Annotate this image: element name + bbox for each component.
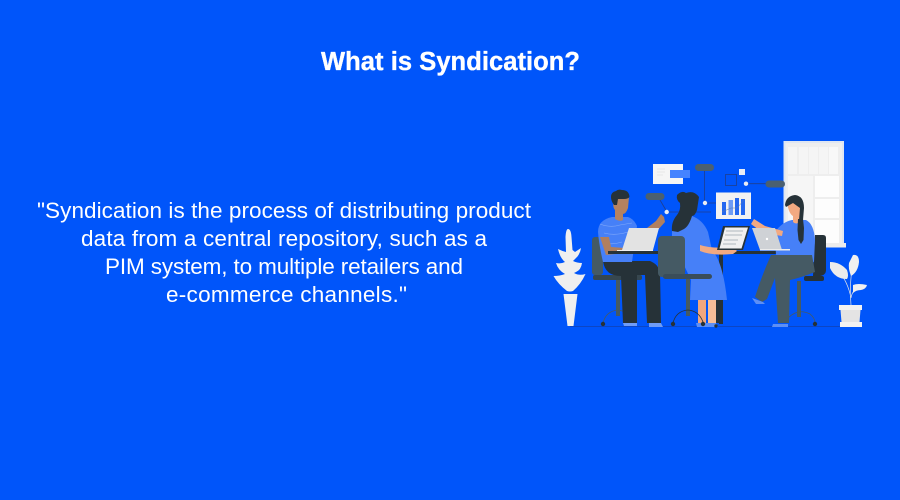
right woman's chair [788,235,826,326]
diagram pills [646,164,785,200]
icon: window [782,141,846,248]
diagram nodes [664,169,748,214]
man's chair [592,237,642,326]
floor line [570,326,842,327]
middle chair [658,236,718,328]
man: head [611,190,630,221]
text block: definition: data from a central repository, such as a [81,226,487,251]
tablet / document [717,226,750,250]
chart card [716,192,751,219]
icon: right plant [830,255,867,327]
middle woman [672,192,737,327]
text block: definition: PIM system, to multiple retailers and [105,254,463,279]
right woman: arm [751,219,783,236]
man: torso [598,214,665,262]
illustration: team at a table [554,141,867,328]
title: What is Syndication? [321,48,580,76]
text block: definition [37,198,532,307]
right woman's laptop [752,228,790,250]
middle woman: legs [696,300,722,327]
man: legs [603,261,663,327]
middle woman: hair [672,192,699,232]
diagram connectors [660,171,766,212]
right woman: torso [775,220,815,262]
man's laptop [617,228,659,252]
icon: white card with blue label [653,164,690,184]
text block: definition: e-commerce channels." [166,282,407,307]
middle woman: dress [672,216,727,300]
right woman: head and braid [785,195,804,244]
icon: left plant [554,229,586,326]
text block: definition: "Syndication is the process of distributing product [37,198,532,223]
table [608,251,824,324]
middle woman: arm [700,245,737,255]
right woman: legs [752,255,815,327]
